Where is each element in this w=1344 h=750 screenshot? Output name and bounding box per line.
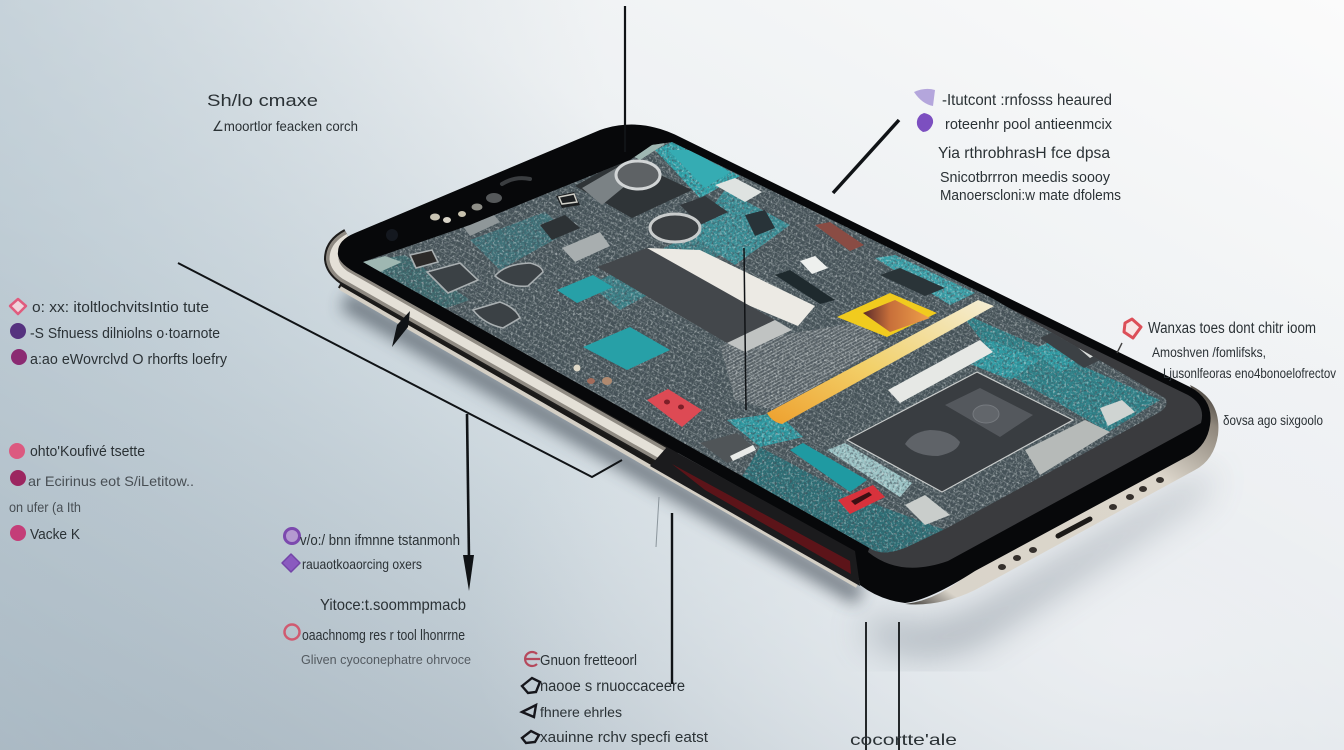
glass black bezel bbox=[338, 125, 1211, 603]
top right callout: Manoerscloni:w mate dfolems bbox=[940, 187, 1121, 204]
top right callout: Yia rthrobhrasH fce dpsa bbox=[938, 145, 1110, 162]
left upper legend: a:ao eWovrclvd O rhorfts loefry bbox=[30, 351, 227, 368]
lower middle legend bbox=[282, 528, 471, 667]
texture bbox=[368, 142, 1163, 552]
left upper legend: o: xx: itoltlochvitsIntio tute bbox=[32, 299, 209, 316]
icon: pink diamond bbox=[10, 299, 26, 314]
left lower legend: ohto'Koufivé tsette bbox=[30, 443, 145, 460]
small board details bbox=[460, 178, 1135, 525]
bottom centre legend: fhnere ehrles bbox=[540, 704, 622, 720]
speckled pads bbox=[363, 136, 665, 272]
bottom centre leader bbox=[671, 513, 673, 684]
top vertical leader bbox=[624, 6, 626, 152]
side arrow head bbox=[392, 311, 410, 347]
left lower legend bbox=[9, 443, 194, 543]
down arrow bbox=[463, 414, 474, 591]
dark side band bbox=[650, 447, 860, 586]
lower middle legend: oaachnomg res r tool lhonrrne bbox=[302, 627, 465, 644]
speaker holes and charging port bbox=[998, 477, 1164, 570]
top right diagonal leader bbox=[833, 120, 899, 193]
lower middle legend: Yitoce:t.soommpmacb bbox=[320, 597, 466, 614]
left lower legend: on ufer (a Ith bbox=[9, 499, 81, 515]
large memory chip bbox=[597, 248, 815, 352]
teal board patches bbox=[363, 142, 1160, 560]
left dark components bbox=[410, 250, 757, 463]
bottom centre legend: naooe s rnuoccaceere bbox=[540, 678, 685, 695]
icon: magenta dot bbox=[11, 349, 27, 365]
bottom centre legend bbox=[522, 652, 709, 746]
left long elbow leader bbox=[178, 263, 622, 477]
glass grey lower margin bbox=[868, 284, 1202, 568]
bottom centre legend: Gnuon fretteoorl bbox=[540, 653, 637, 669]
icon: purple diamond bbox=[282, 554, 300, 572]
bottom twin leaders bbox=[866, 622, 899, 750]
main processor bbox=[847, 372, 1073, 492]
smartphone bbox=[334, 120, 1218, 604]
left upper legend bbox=[10, 299, 227, 368]
bottom centre legend: xauinne rchv specfi eatst bbox=[540, 729, 709, 746]
left upper legend: -S Sfnuess dilniolns o·toarnote bbox=[30, 325, 220, 342]
right callout: δovsa ago sixgoolo bbox=[1223, 412, 1323, 428]
right callout: Wanxas toes dont chitr ioom bbox=[1148, 320, 1316, 337]
circuit board bbox=[363, 142, 1166, 552]
icon: red ring bbox=[284, 624, 300, 640]
top right callout: -Itutcont :rnfosss heaured bbox=[942, 92, 1112, 109]
lower thin silver rail bbox=[340, 284, 857, 586]
red connector large bbox=[647, 389, 702, 427]
light stripe connector field bbox=[827, 443, 912, 497]
icon: purple badge bbox=[917, 113, 933, 132]
lower middle legend: Gliven cyoconephatre ohrvoce bbox=[301, 652, 471, 667]
faint leader bbox=[656, 497, 659, 547]
icon: purple dot bbox=[10, 323, 26, 339]
icon: pink dot bbox=[9, 443, 25, 459]
icon: red half ring bbox=[525, 652, 540, 666]
icon: black outline shape lower bbox=[522, 731, 539, 743]
icon: crimson dot bbox=[10, 470, 26, 486]
white modules bbox=[888, 340, 1110, 475]
lower middle legend: rauaotkoaorcing oxers bbox=[302, 556, 422, 572]
top left text block: ∠moortlor feacken corch bbox=[212, 118, 358, 134]
right frame silver band bbox=[905, 385, 1218, 604]
icon: black arrow shape bbox=[522, 705, 536, 717]
speaker and sensor dots bbox=[386, 178, 530, 241]
left lower legend: Vacke K bbox=[30, 526, 80, 543]
callout lines and arrows bbox=[178, 6, 1122, 750]
top left text block: Sh/lo cmaxe bbox=[207, 91, 318, 110]
top right callout bbox=[914, 89, 1121, 204]
top right callout: roteenhr pool antieenmcix bbox=[945, 116, 1112, 133]
left lower legend: ar Ecirinus eot S/iLetitow.. bbox=[28, 473, 194, 489]
icon: red hexagon ring bbox=[1124, 319, 1141, 338]
top right callout: Snicotbrrron meedis soooy bbox=[940, 169, 1110, 186]
lower middle legend: v/o:/ bnn ifmnne tstanmonh bbox=[300, 532, 460, 549]
yellow connector bar bbox=[767, 300, 994, 424]
icon: rose dot bbox=[10, 525, 26, 541]
upper silver frame band bbox=[334, 238, 673, 461]
camera module bbox=[556, 158, 728, 242]
right short tick bbox=[1117, 343, 1122, 353]
right callout: Amoshven /fomlifsks, bbox=[1152, 344, 1266, 360]
solid teal chips bbox=[557, 150, 867, 492]
phone shadow bbox=[345, 300, 1215, 653]
top left text block bbox=[207, 91, 358, 134]
right callout bbox=[1124, 319, 1336, 428]
inner leader bbox=[744, 248, 746, 410]
icon: lavender tag bbox=[914, 89, 935, 106]
red side strip bbox=[672, 464, 851, 574]
icon: black outline shape bbox=[522, 678, 540, 693]
red connector small bbox=[838, 485, 885, 514]
grey striped trace field bbox=[720, 322, 885, 410]
icon: purple ring bbox=[284, 528, 300, 544]
yellow chip bbox=[837, 293, 937, 337]
bottom right caption: cocortte'ale bbox=[850, 732, 957, 749]
